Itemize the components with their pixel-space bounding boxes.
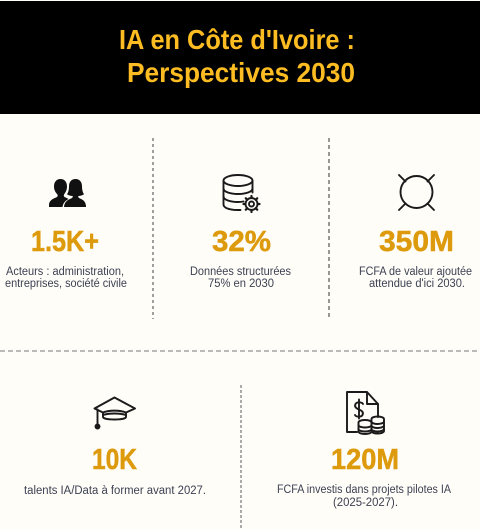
value: 10K bbox=[92, 444, 137, 476]
description: FCFA de valeur ajoutée bbox=[359, 266, 472, 278]
title: Perspectives 2030 bbox=[127, 57, 355, 88]
description bbox=[277, 484, 451, 509]
value: 1.5K+ bbox=[31, 226, 99, 258]
panel: acteurs bbox=[5, 179, 127, 290]
description: 75% en 2030 bbox=[208, 278, 274, 290]
icon: currency sign bbox=[399, 175, 434, 210]
description bbox=[190, 266, 291, 290]
icon: database with gear bbox=[224, 175, 260, 212]
description: Acteurs : administration, bbox=[6, 266, 124, 278]
title: IA en Côte d'Ivoire : bbox=[119, 24, 355, 55]
panel: données bbox=[190, 175, 291, 290]
icon: two people bbox=[49, 179, 86, 207]
panel: valeur ajoutée bbox=[359, 175, 472, 290]
description: FCFA investis dans projets pilotes IA bbox=[277, 484, 451, 496]
value: 350M bbox=[379, 226, 454, 258]
icon: graduation cap bbox=[94, 398, 135, 428]
description bbox=[5, 266, 127, 290]
description: entreprises, société civile bbox=[5, 278, 127, 290]
description: Données structurées bbox=[190, 266, 291, 278]
panel: talents bbox=[24, 398, 206, 497]
icon: document with dollar and coins bbox=[347, 392, 384, 434]
value: 120M bbox=[331, 444, 399, 476]
description: attendue d'ici 2030. bbox=[369, 278, 465, 290]
description: (2025-2027). bbox=[333, 497, 398, 509]
description bbox=[359, 266, 472, 290]
panel: investissements bbox=[277, 392, 451, 509]
value: 32% bbox=[212, 226, 271, 258]
description: talents IA/Data à former avant 2027. bbox=[24, 485, 206, 497]
title bbox=[119, 24, 355, 88]
